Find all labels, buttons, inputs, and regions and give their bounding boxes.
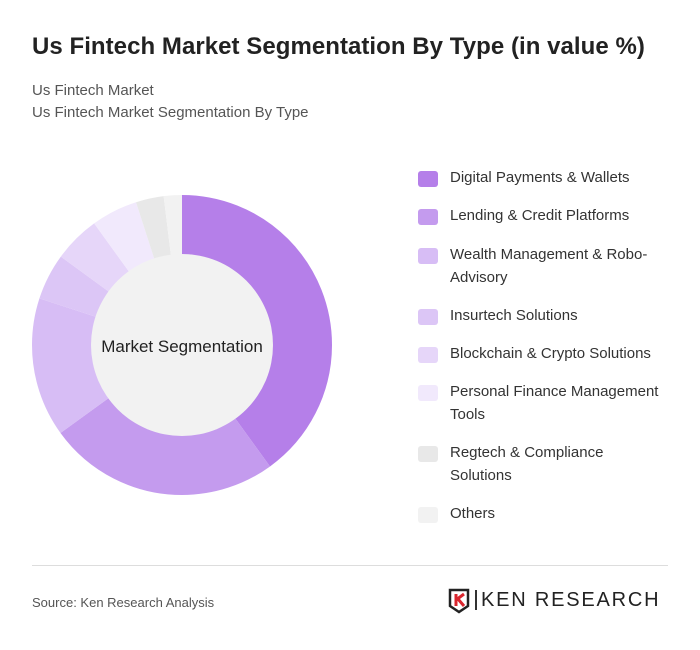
text: Wealth Management & Robo-Advisory [450, 246, 647, 286]
legend [418, 169, 658, 523]
subtitle: Us Fintech Market [32, 82, 154, 99]
logo: KEN RESEARCH [481, 589, 660, 611]
subtitle: Us Fintech Market Segmentation By Type [32, 104, 309, 121]
subtitle [32, 82, 309, 121]
text: Regtech & Compliance Solutions [450, 444, 603, 484]
source: Source: Ken Research Analysis [32, 595, 214, 610]
text: Personal Finance Management Tools [450, 383, 658, 423]
donut chart: Market Segmentation [101, 337, 263, 356]
title: Us Fintech Market Segmentation By Type (in value %) [32, 33, 645, 60]
text: Blockchain & Crypto Solutions [450, 345, 651, 362]
text: Lending & Credit Platforms [450, 207, 629, 224]
text: Insurtech Solutions [450, 307, 578, 324]
text: Others [450, 505, 495, 522]
donut chart [32, 195, 332, 495]
text: Digital Payments & Wallets [450, 169, 630, 186]
